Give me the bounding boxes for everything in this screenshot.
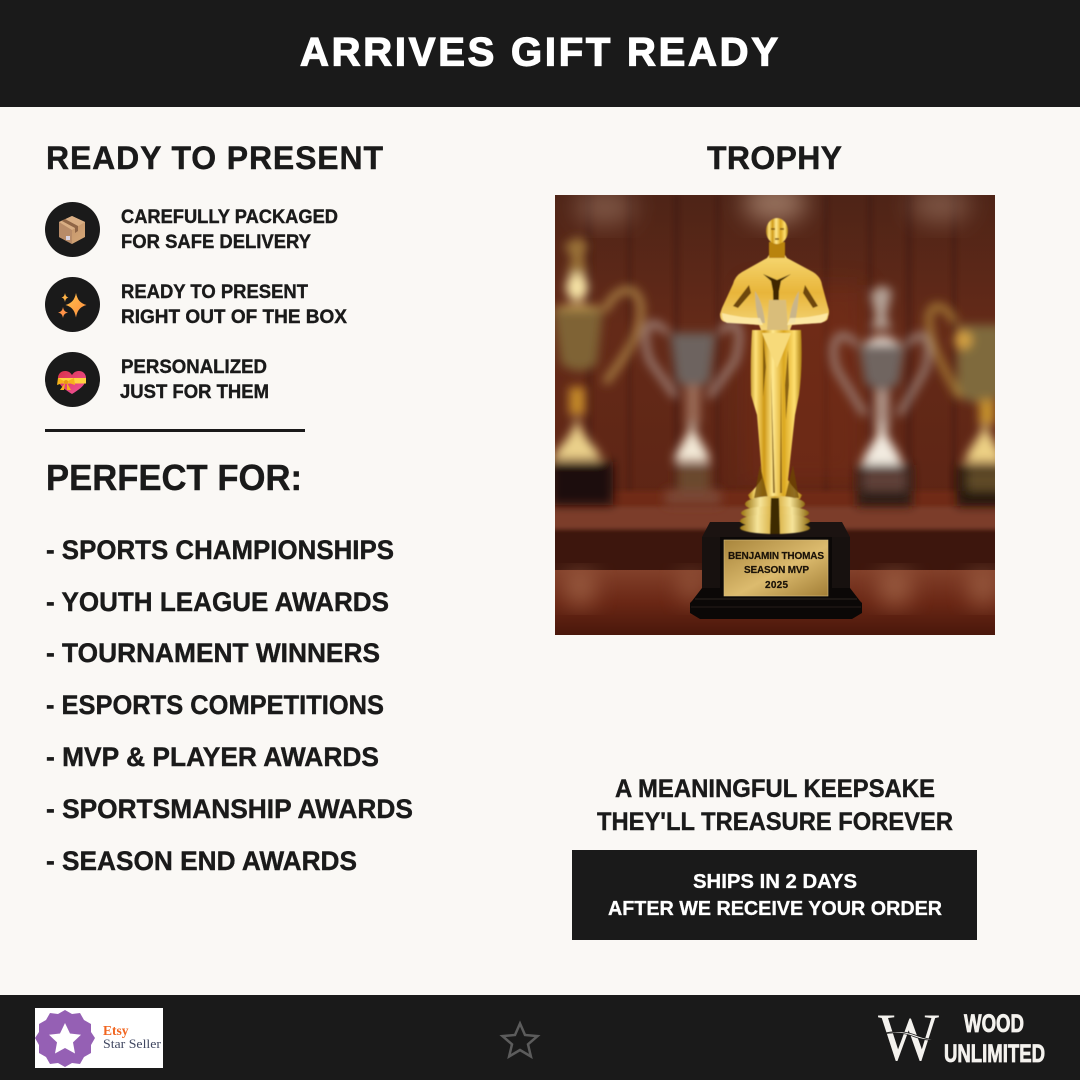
feature: ready right out of the box [45,277,347,332]
list of occasions: - ESPORTS COMPETITIONS [46,690,384,720]
base plinth [690,588,862,619]
statue torso and arms [720,255,829,330]
shipping callout: AFTER WE RECEIVE YOUR ORDER [608,898,943,920]
header band [0,0,1080,107]
logo wordmark: WOOD [964,1010,1024,1038]
wooden wall backdrop [555,195,995,494]
icon: package [45,202,100,257]
base front [720,537,832,588]
blurred background shelf [545,491,1005,574]
tagline: THEY'LL TREASURE FOREVER [597,808,953,836]
blurred background trophies [549,237,1007,506]
right silver cup [833,285,928,506]
feature text: JUST FOR THEM [120,381,269,403]
footer band [0,995,1080,1080]
icon: outlined star [502,1024,538,1056]
engraved plaque [724,540,828,596]
trophy black base [690,522,862,619]
shipping callout [572,850,977,940]
logo swoosh [878,1032,940,1040]
feature: carefully packaged [45,202,338,257]
statue domed base [744,496,806,509]
feature text: PERSONALIZED [121,356,267,378]
engraved plaque: 2025 [765,580,788,591]
purple seal [35,1010,95,1067]
icon: gift heart [45,352,100,407]
list of occasions: - SPORTS CHAMPIONSHIPS [46,535,394,565]
logo mark: W [878,999,940,1075]
white star [49,1023,81,1054]
trophy photo [545,183,1007,635]
heading: trophy: TROPHY [707,140,842,176]
feature text: READY TO PRESENT [121,281,308,303]
heading: perfect for: PERFECT FOR: [46,457,302,498]
right gold cup [929,306,1007,506]
base top surface [702,522,850,537]
statue head [769,242,785,258]
panel: perfect for [46,457,420,876]
icon: sparkles [45,277,100,332]
badge: etsy star seller [35,1008,163,1068]
heading: ready to present: READY TO PRESENT [46,140,383,176]
feature text: CAREFULLY PACKAGED [121,206,338,228]
etsy wordmark: Etsy [103,1023,129,1038]
feature text: RIGHT OUT OF THE BOX [121,306,347,328]
list of occasions: - TOURNAMENT WINNERS [46,638,380,668]
left silver cup [645,324,739,505]
list of occasions: - YOUTH LEAGUE AWARDS [46,587,389,617]
engraved plaque: BENJAMIN THOMAS [728,551,824,562]
logo: wood unlimited [878,999,1045,1075]
logo wordmark: UNLIMITED [944,1040,1045,1068]
list of occasions: - SEASON END AWARDS [46,846,357,876]
star seller wordmark: Star Seller [103,1036,162,1051]
list of occasions: - SPORTSMANSHIP AWARDS [46,794,413,824]
feature text: FOR SAFE DELIVERY [121,231,311,253]
engraved plaque: SEASON MVP [744,565,809,576]
list of occasions: - MVP & PLAYER AWARDS [46,742,379,772]
title: ARRIVES GIFT READY [300,30,778,74]
shipping callout: SHIPS IN 2 DAYS [693,871,857,893]
left gold cup [549,237,641,505]
polished table [555,570,995,635]
panel: ready to present [45,140,383,407]
feature: personalized [45,352,269,407]
statuette [720,218,829,534]
tagline: A MEANINGFUL KEEPSAKE [615,775,935,803]
statue body and legs [748,330,802,499]
